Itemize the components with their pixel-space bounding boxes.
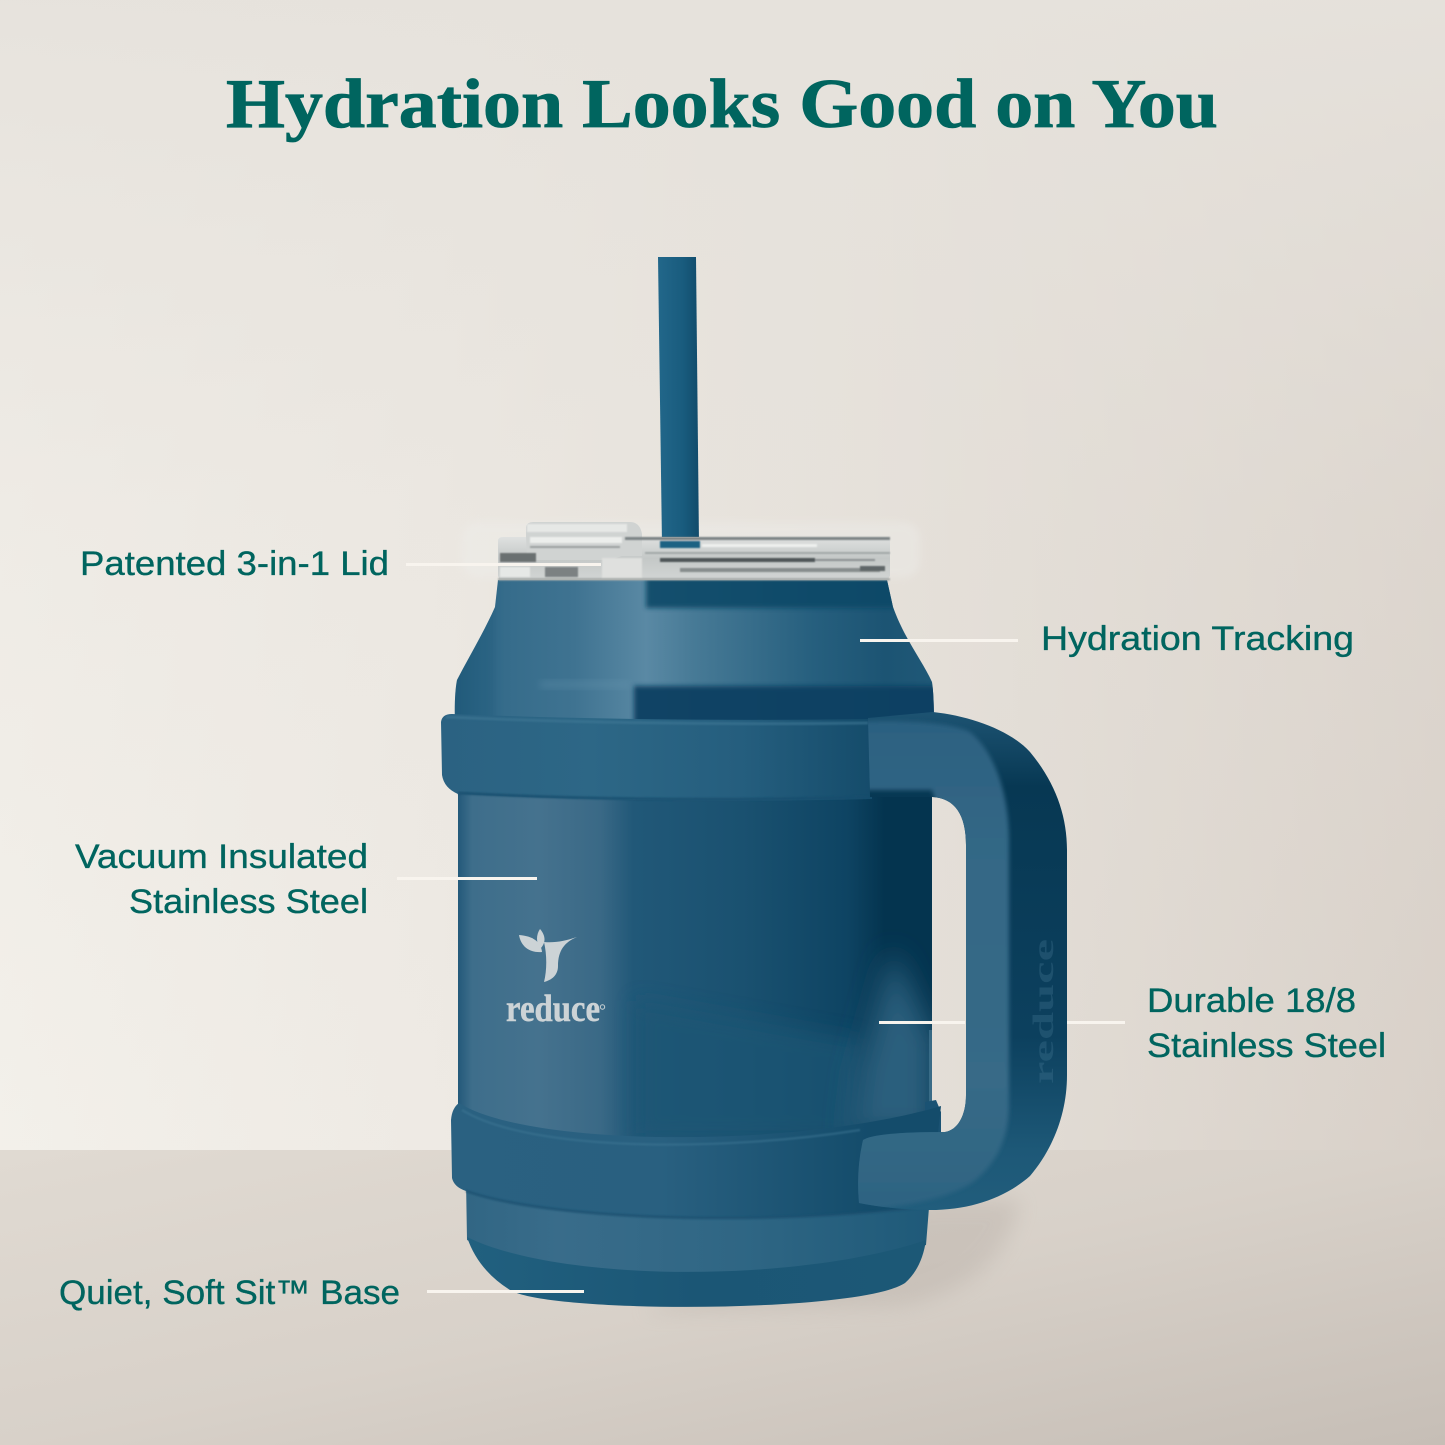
leader line: hydration tracking [860,639,1018,642]
base ledge [925,1100,941,1135]
product: tumbler mug [441,257,1067,1307]
floor [0,1150,1445,1445]
handle [840,712,1067,1212]
label: durable steel [1147,982,1386,1065]
label: vacuum insulated: Stainless Steel [129,883,368,921]
main body [458,790,935,1140]
label: durable steel: Stainless Steel [1147,1027,1386,1065]
soft sit base [467,1237,926,1307]
top band [441,714,872,801]
handle outer side [858,712,1067,1210]
leader line: durable steel outer [1067,1021,1125,1024]
leader line: lid [406,563,601,566]
label: durable steel: Durable 18/8 [1147,982,1356,1020]
flip tab [526,522,642,560]
label: vacuum insulated [75,838,368,921]
lid [498,522,890,580]
logo: reduce [506,988,600,1030]
leader line: vacuum insulated [397,877,537,880]
label: vacuum insulated: Vacuum Insulated [75,838,368,876]
logo [506,929,605,1030]
label: lid: Patented 3-in-1 Lid [80,545,389,583]
title: Hydration Looks Good on You [226,66,1218,143]
lid halo [462,522,920,578]
straw [658,257,699,545]
base band [451,1103,941,1218]
label: base: Quiet, Soft Sit™ Base [59,1274,400,1312]
leader line: base [427,1290,584,1293]
label: hydration tracking: Hydration Tracking [1041,620,1354,658]
shoulder [454,580,934,720]
handle embossed text: reduce [1027,939,1060,1084]
lid streaks [498,524,890,580]
mug shadow on floor [640,1200,1020,1312]
handle front face [858,721,1011,1207]
lower section [466,1180,930,1274]
lid rim [498,537,890,580]
leader line: durable steel inner [879,1021,965,1024]
background wall [0,0,1445,1150]
